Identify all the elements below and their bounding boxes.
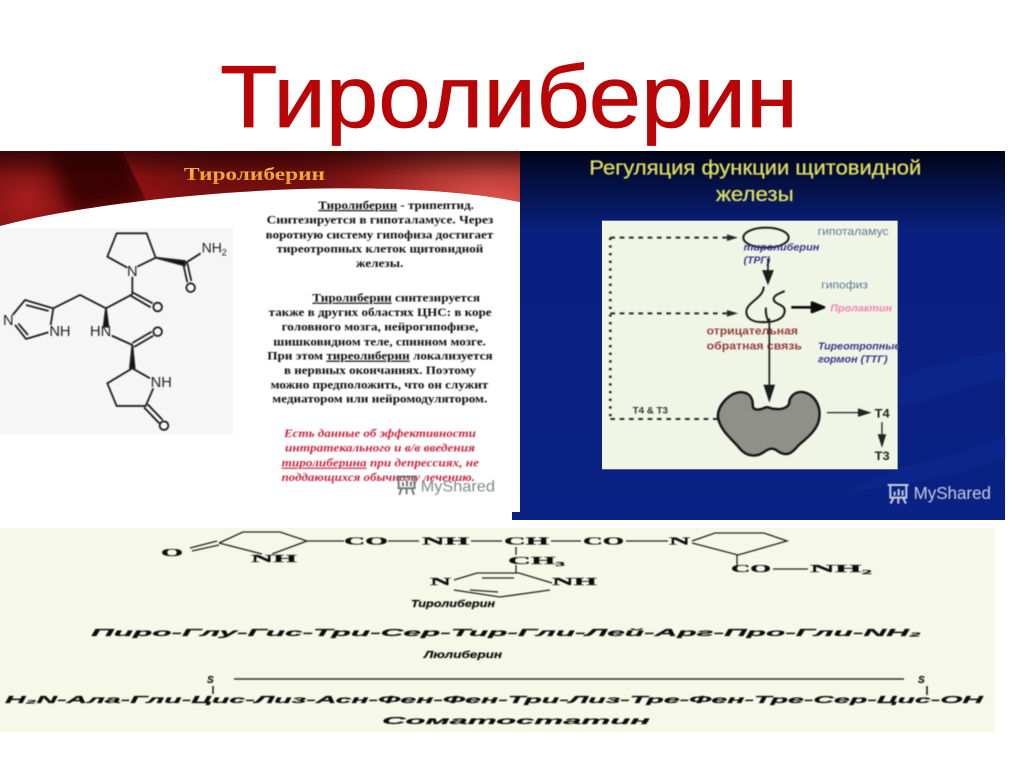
label: TRH bbox=[744, 241, 820, 266]
text block: description: воротную систему гипофиза достигает bbox=[266, 227, 493, 241]
arrow and label: T3: T3 bbox=[875, 449, 890, 463]
chart: thyroliberin structural formula: NH₂ bbox=[810, 563, 874, 575]
label: negative feedback: отрицательная bbox=[707, 325, 798, 337]
watermark: MyShared right: MyShared bbox=[914, 483, 991, 503]
panel: molecule background bbox=[0, 228, 233, 434]
panel: right slide content bbox=[589, 156, 1005, 504]
label: TSH: Тиреотропные bbox=[818, 341, 901, 352]
decorative lighter swooshes bbox=[899, 352, 1005, 408]
callout: red italic note: интратекального и в/в введения bbox=[285, 441, 475, 455]
slide heading bbox=[589, 156, 921, 206]
chart: thyroliberin structural formula: CH₃ bbox=[508, 555, 567, 567]
label: TRH: тиролиберин bbox=[744, 241, 820, 253]
arrow and label: T4: T4 bbox=[875, 407, 890, 421]
arrow and label: T3 bbox=[875, 422, 890, 463]
red header band bbox=[0, 151, 520, 227]
chart: thyroliberin structural formula: NH bbox=[251, 553, 298, 565]
icon: pituitary bbox=[746, 287, 785, 322]
text block: description: Тиролиберин синтезируется bbox=[312, 291, 481, 305]
label: TRH: (ТРГ) bbox=[744, 255, 771, 266]
label: hypothalamus: гипоталамус bbox=[818, 226, 889, 238]
formula: somatostatin sequence: S bbox=[918, 675, 925, 686]
chart: thyroliberin structural formula: CO bbox=[731, 563, 772, 575]
label: TSH bbox=[818, 341, 901, 365]
icon: hypothalamus bbox=[743, 228, 789, 248]
chart: molecular structure of thyroliberin bbox=[3, 233, 227, 430]
text block: description: тиреотропных клеток щитовидной bbox=[277, 242, 483, 256]
formula: somatostatin sequence: S bbox=[207, 675, 214, 686]
dashed feedback arrows bbox=[610, 234, 738, 419]
label: TSH: гормон (ТТГ) bbox=[818, 354, 888, 365]
panel: bottom peptide formulas bbox=[0, 528, 995, 732]
formula: somatostatin sequence bbox=[5, 675, 985, 706]
chart: molecular structure of thyroliberin: HN bbox=[90, 324, 111, 340]
panel: right blue slide background bbox=[512, 151, 1005, 520]
panel: left slide bbox=[0, 151, 520, 512]
arrow: pituitary to thyroid bbox=[765, 318, 774, 400]
label: negative feedback: обратная связь bbox=[707, 340, 802, 352]
label: negative feedback bbox=[707, 325, 802, 352]
label: thyroliberin: Тиролиберин bbox=[411, 598, 495, 610]
icon: thyroid gland bbox=[718, 392, 819, 455]
text block: description: Тиролиберин - трипептид. bbox=[318, 198, 474, 212]
chart: molecular structure of thyroliberin: 2 bbox=[222, 247, 227, 257]
chart: thyroliberin structural formula bbox=[161, 532, 874, 597]
watermark: MyShared left: MyShared bbox=[421, 479, 495, 496]
slide heading: Регуляция функции щитовидной bbox=[589, 156, 921, 179]
label: somatostatin: Соматостатин bbox=[382, 716, 650, 727]
label: prolactin: Пролактин bbox=[830, 304, 892, 315]
chart: molecular structure of thyroliberin: NH bbox=[151, 375, 172, 391]
text block: description: шишковидном теле, спинном мозге. bbox=[273, 334, 486, 348]
label: T4 and T3: T4 & T3 bbox=[633, 405, 668, 415]
chart: thyroliberin structural formula: CO bbox=[583, 536, 625, 548]
text block: description: медиатором или нейромодулятором. bbox=[272, 392, 487, 406]
text block: description: можно предположить, что он служит bbox=[271, 377, 488, 391]
text block: description: Синтезируется в гипоталамусе. Через bbox=[267, 213, 493, 227]
chart: thyroliberin structural formula: O bbox=[161, 547, 184, 559]
label: luliberin: Люлиберин bbox=[423, 649, 502, 661]
chart: thyroliberin structural formula: NH bbox=[552, 576, 598, 588]
chart: thyroliberin structural formula: CH bbox=[504, 536, 550, 548]
arrow: prolactin bbox=[791, 303, 824, 312]
title: Тиролиберин bbox=[220, 47, 798, 146]
chart: molecular structure of thyroliberin: NH bbox=[202, 239, 222, 255]
formula: luliberin sequence: Пиро-Глу-Гис-Три-Сер-Тир-Гли-Лей-Арг-Про-Гли-NH₂ bbox=[91, 627, 921, 639]
chart: thyroliberin structural formula: N bbox=[669, 536, 690, 548]
chart: molecular structure of thyroliberin: N bbox=[3, 313, 14, 329]
diagram: thyroid regulation bbox=[602, 221, 901, 469]
arrow and label: T4 bbox=[827, 407, 890, 421]
label: pituitary: гипофиз bbox=[821, 279, 868, 291]
watermark: MyShared left bbox=[397, 477, 495, 496]
text block: description: При этом тиреолиберин локализуется bbox=[267, 349, 493, 363]
formula: somatostatin sequence: H₂N-Ала-Гли-Цис-Лиз-Асн-Фен-Фен-Три-Лиз-Тре-Фен-Тре-Сер-Цис-ОН bbox=[5, 695, 985, 706]
text block: description: также в других областях ЦНС: в коре bbox=[269, 305, 492, 319]
chart: molecular structure of thyroliberin: NH bbox=[49, 324, 71, 340]
chart: thyroliberin structural formula: N bbox=[430, 576, 451, 588]
callout: red italic note: тиролиберина при депрессиях, не bbox=[282, 456, 480, 470]
arrow: hypothalamus to pituitary bbox=[763, 258, 773, 283]
text block: description: в нервных окончаниях. Поэтому bbox=[284, 363, 476, 377]
text block: description: головного мозга, нейрогипофизе, bbox=[282, 320, 478, 334]
chart: thyroliberin structural formula: CO bbox=[344, 536, 389, 548]
slide heading: Тиролиберин bbox=[184, 164, 325, 184]
callout: red italic note: Есть данные об эффективности bbox=[283, 426, 476, 440]
chart: thyroliberin structural formula: NH bbox=[422, 536, 470, 548]
callout: red italic note bbox=[282, 426, 480, 484]
text block: description: железы. bbox=[356, 256, 403, 270]
text block: description bbox=[266, 198, 493, 406]
chart: molecular structure of thyroliberin: N bbox=[127, 264, 138, 280]
callout: red italic note: поддающихся обычному лечению. bbox=[282, 470, 475, 484]
slide heading: железы bbox=[716, 183, 794, 206]
